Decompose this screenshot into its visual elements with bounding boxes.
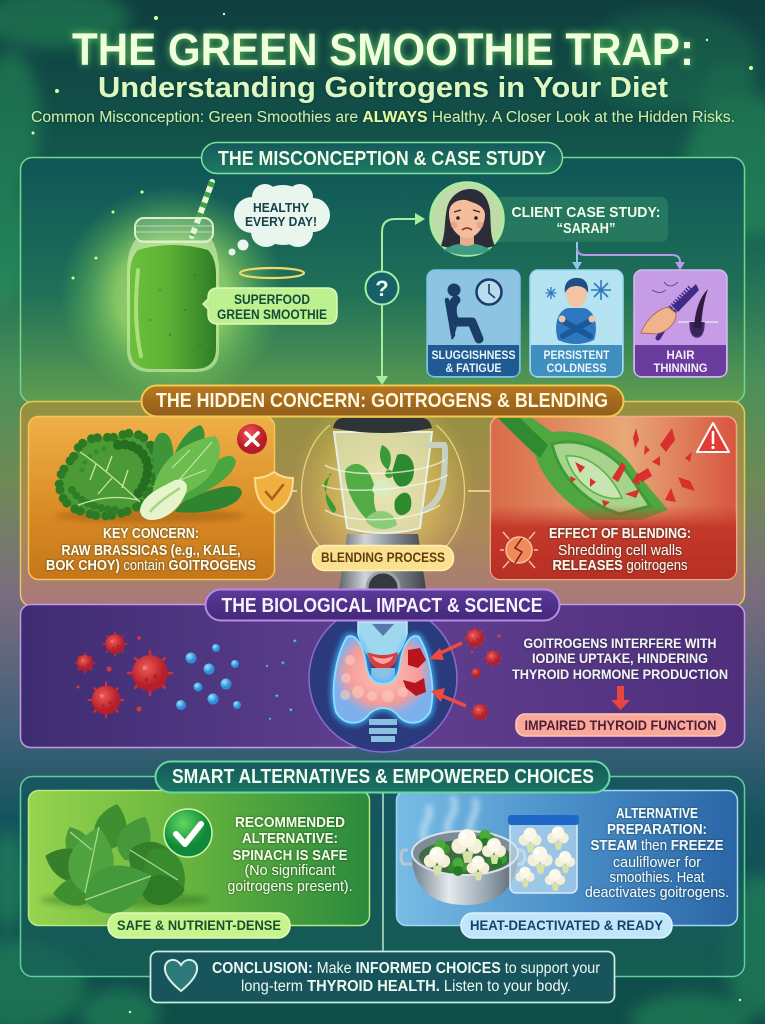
section heading bbox=[142, 386, 624, 416]
icon: goitrogen viruses bbox=[75, 632, 172, 718]
callout: safe: SAFE & NUTRIENT-DENSE bbox=[117, 917, 281, 933]
text: spinach recommendation: ALTERNATIVE: bbox=[242, 831, 338, 847]
thought cloud: HEALTHY bbox=[253, 200, 309, 215]
callout: heat-deactivated: HEAT-DEACTIVATED & READY bbox=[470, 917, 664, 933]
icon: warning triangle bbox=[697, 423, 729, 452]
blender glow bbox=[291, 390, 475, 590]
subtitle: Understanding Goitrogens in Your Diet bbox=[98, 72, 668, 104]
section heading bbox=[206, 590, 560, 620]
jar glow bbox=[60, 187, 284, 403]
thyroid gland bbox=[334, 636, 432, 723]
text: spinach recommendation: RECOMMENDED bbox=[235, 815, 345, 831]
callout: superfood: GREEN SMOOTHIE bbox=[217, 307, 327, 322]
text: mechanism: THYROID HORMONE PRODUCTION bbox=[512, 666, 728, 682]
callout: safe bbox=[108, 913, 290, 938]
panel: hidden concern bbox=[20, 386, 744, 606]
text: alternative preparation: cauliflower for bbox=[613, 855, 701, 871]
title block bbox=[31, 24, 735, 126]
text: mechanism: GOITROGENS INTERFERE WITH bbox=[524, 635, 716, 651]
text: mechanism: IODINE UPTAKE, HINDERING bbox=[532, 650, 708, 666]
icon: right viruses bbox=[464, 627, 502, 721]
text: conclusion bbox=[212, 960, 600, 995]
section heading: THE MISCONCEPTION & CASE STUDY bbox=[218, 148, 547, 170]
case study label: “SARAH” bbox=[556, 220, 616, 237]
section heading bbox=[156, 762, 610, 792]
panel: coldness card bbox=[530, 270, 623, 377]
panel: sluggishness card bbox=[427, 270, 520, 377]
panel: spinach bbox=[28, 790, 370, 938]
panel: smart alternatives bbox=[20, 762, 744, 976]
text: spinach recommendation: SPINACH IS SAFE bbox=[232, 848, 348, 864]
icon: cracked wall bbox=[500, 532, 538, 568]
icon: spinach leaves bbox=[40, 800, 197, 922]
panel: misconception and case study bbox=[20, 142, 744, 403]
icon: thyroid circle bbox=[309, 604, 457, 752]
thyroid glow bbox=[334, 636, 432, 723]
icon: freezer container bbox=[508, 815, 579, 893]
text: alternative preparation: PREPARATION: bbox=[607, 822, 707, 838]
panel: biological impact bbox=[20, 590, 744, 752]
icon: steam bbox=[423, 796, 476, 842]
icon: warning cross bbox=[237, 424, 267, 454]
decorative gold rings bbox=[275, 425, 490, 555]
callout: blending process: BLENDING PROCESS bbox=[321, 550, 445, 565]
callout: impaired function bbox=[516, 714, 725, 736]
panel: hair thinning card: THINNING bbox=[654, 361, 708, 375]
panel: key concern: RAW BRASSICAS (e.g., KALE, bbox=[62, 543, 240, 559]
sparkles bbox=[72, 190, 144, 280]
thought cloud bbox=[228, 184, 330, 256]
panel: conclusion bbox=[150, 952, 614, 1002]
text: alternative preparation: deactivates goitrogens. bbox=[585, 885, 729, 901]
text: conclusion: CONCLUSION: Make INFORMED CHOICES to support your bbox=[212, 960, 600, 977]
text: mechanism bbox=[512, 635, 728, 682]
icon: iodine droplets bbox=[176, 640, 296, 720]
panel: key concern: KEY CONCERN: bbox=[103, 526, 199, 542]
panel: sluggishness card: SLUGGISHNESS bbox=[432, 348, 516, 362]
text: alternative preparation bbox=[585, 806, 729, 901]
icon: ruptured plant cell bbox=[498, 418, 695, 520]
icon: shield bbox=[255, 472, 293, 513]
text: spinach recommendation bbox=[228, 815, 352, 895]
icon: pot of vegetables bbox=[401, 829, 525, 905]
callout: superfood: SUPERFOOD bbox=[234, 292, 310, 307]
panel: effect of blending: RELEASES goitrogens bbox=[552, 558, 688, 574]
icon: shivering person bbox=[546, 278, 611, 344]
case study label bbox=[490, 197, 668, 242]
trachea bbox=[358, 622, 407, 656]
icon: bok choy bbox=[140, 425, 242, 520]
damage spots bbox=[408, 648, 426, 668]
callout: blending process bbox=[312, 546, 454, 570]
arrow: result bbox=[611, 686, 630, 710]
icon: halo bbox=[240, 268, 304, 278]
text: conclusion: long-term THYROID HEALTH. Listen to your body. bbox=[241, 978, 571, 995]
icon: smoothie jar bbox=[127, 182, 219, 372]
panel: key concern bbox=[28, 416, 274, 580]
text: spinach recommendation: (No significant bbox=[244, 863, 336, 879]
icon: heart bbox=[165, 960, 197, 991]
panel: steam and freeze bbox=[396, 790, 738, 938]
panel: effect of blending: EFFECT OF BLENDING: bbox=[549, 526, 691, 542]
arrow: iodine to thyroid bbox=[243, 670, 327, 690]
arrow: question path bbox=[366, 213, 425, 385]
panel: hair thinning card: HAIR bbox=[666, 348, 695, 362]
leaves in jar bbox=[345, 445, 414, 529]
panel: coldness card: PERSISTENT bbox=[544, 348, 610, 362]
arrows: symptom connectors bbox=[572, 242, 685, 270]
icon: seated person and clock bbox=[447, 280, 502, 339]
callout: heat-deactivated bbox=[461, 913, 672, 938]
arrow: question path: ? bbox=[375, 276, 389, 301]
icon: kale bbox=[59, 433, 157, 516]
thought cloud: EVERY DAY! bbox=[245, 214, 317, 229]
icon: comb and hair follicle bbox=[641, 282, 718, 338]
section heading: THE BIOLOGICAL IMPACT & SCIENCE bbox=[222, 595, 542, 617]
callout: superfood bbox=[203, 288, 337, 324]
section heading: THE HIDDEN CONCERN: GOITROGENS & BLENDING bbox=[156, 390, 608, 412]
text: alternative preparation: ALTERNATIVE bbox=[616, 806, 698, 822]
panel: effect of blending bbox=[490, 416, 736, 580]
text: alternative preparation: STEAM then FREEZE bbox=[590, 838, 724, 854]
case study label: CLIENT CASE STUDY: bbox=[512, 204, 660, 221]
section heading bbox=[202, 142, 562, 174]
intro line: Common Misconception: Green Smoothies are ALWAYS Healthy. A Closer Look at the Hidden Risks. bbox=[31, 109, 735, 126]
section heading: SMART ALTERNATIVES & EMPOWERED CHOICES bbox=[172, 766, 594, 788]
panel: hair thinning card bbox=[634, 270, 727, 377]
callout: impaired function: IMPAIRED THYROID FUNCTION bbox=[524, 717, 716, 733]
text: spinach recommendation: goitrogens present). bbox=[228, 879, 352, 895]
panel: coldness card: COLDNESS bbox=[546, 361, 606, 375]
panel: sluggishness card: & FATIGUE bbox=[446, 361, 502, 375]
panel: key concern: BOK CHOY) contain GOITROGENS bbox=[46, 558, 256, 574]
icon: check badge bbox=[164, 809, 212, 857]
title: THE GREEN SMOOTHIE TRAP: bbox=[72, 24, 694, 75]
icon: Sarah avatar bbox=[430, 182, 504, 256]
arrows: red attack bbox=[429, 643, 466, 706]
text: alternative preparation: smoothies. Heat bbox=[610, 870, 704, 886]
icon: blender bbox=[322, 418, 448, 604]
panel: effect of blending: Shredding cell walls bbox=[558, 543, 682, 559]
